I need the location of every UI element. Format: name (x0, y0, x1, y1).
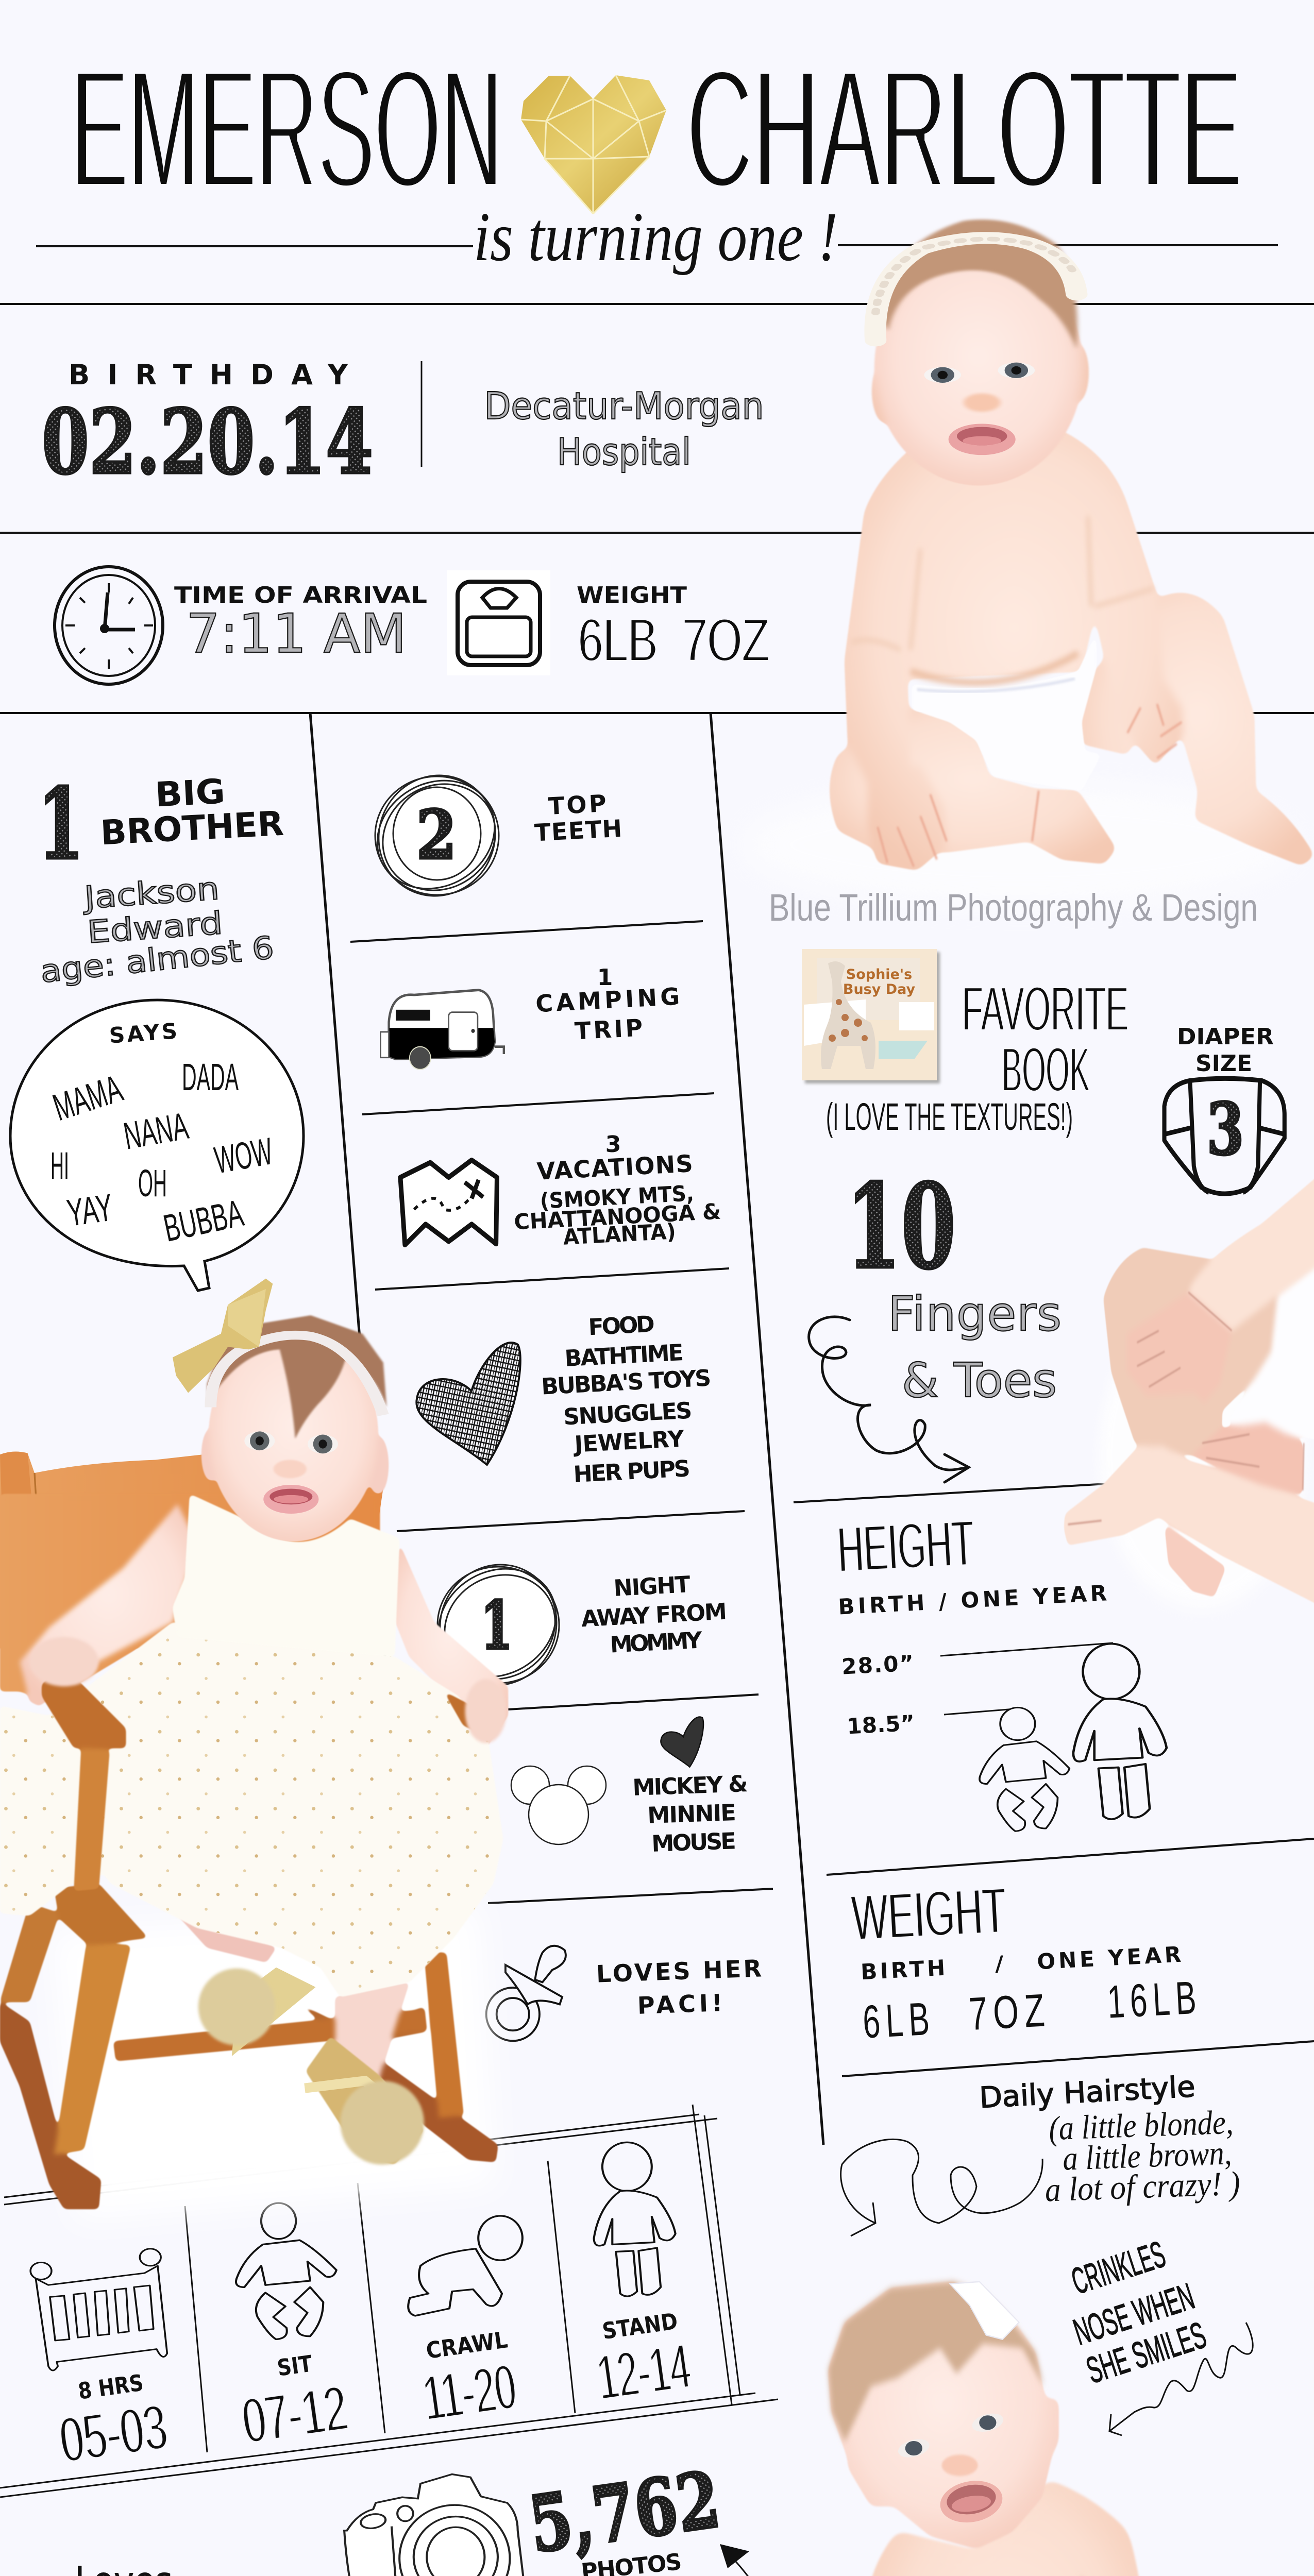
panel: says speech bubble: HI (50, 1144, 69, 1187)
panel: favorite things: JEWELRY (572, 1426, 685, 1458)
panel: favorite things: FOOD (587, 1311, 655, 1341)
panel: mickey and minnie (511, 1717, 748, 1857)
panel: diaper size: DIAPER (1177, 1024, 1274, 1050)
panel: photos taken (344, 2454, 774, 2576)
panel: mickey and minnie: MOUSE (651, 1828, 736, 1857)
panel: daily hairstyle: a lot of crazy! ) (1045, 2164, 1241, 2209)
panel: big brother (38, 767, 285, 990)
arrow: curly to hands (809, 1317, 969, 1482)
icon: small scribble heart (661, 1717, 703, 1767)
icon: crib and sleep: 8 HRS (77, 2370, 145, 2405)
panel: ten fingers and toes: 10 (846, 1159, 956, 1295)
icon: sitting baby (236, 2203, 351, 2456)
panel: weight comparison: BIRTH (860, 1955, 946, 1985)
subtitle: is turning one ! (474, 198, 838, 276)
panel: paci (486, 1946, 762, 2041)
icon: camera (344, 2474, 526, 2576)
panel: height: 28.0” (841, 1650, 914, 1680)
panel: says speech bubble (10, 1000, 304, 1291)
panel: height: BIRTH / ONE YEAR (837, 1580, 1107, 1620)
photo: baby legs and hands crop (1064, 1174, 1314, 1608)
panel: camping trip (381, 964, 680, 1070)
panel: vacations: CHATTANOOGA & (513, 1199, 721, 1235)
panel: favorite things: HER PUPS (573, 1455, 691, 1488)
panel: vacations: VACATIONS (536, 1149, 694, 1185)
panel: top teeth: TEETH (534, 815, 622, 846)
panel: time of arrival and birth weight: 6LB 7OZ (578, 606, 769, 674)
panel: weight comparison: 6LB (862, 1993, 936, 2048)
panel: favorite things: SNUGGLES (563, 1398, 693, 1431)
arrow: squiggle to baby (841, 2139, 1042, 2236)
icon: standing baby: STAND (601, 2308, 679, 2345)
favorite book label: FAVORITE (962, 974, 1128, 1044)
panel: says speech bubble: YAY (64, 1186, 115, 1234)
text: crinkles nose when she smiles (1067, 2234, 1211, 2392)
panel: says speech bubble: SAYS (108, 1018, 178, 1048)
icon: crib and sleep (30, 2249, 172, 2476)
title: EMERSON (71, 34, 502, 223)
panel: birthday: Hospital (557, 430, 691, 473)
icon: standing baby: 12-14 (593, 2331, 695, 2413)
panel: photos taken: 5,762 (524, 2454, 725, 2570)
panel: weight comparison (850, 1875, 1203, 2048)
panel: camping trip: TRIP (574, 1014, 643, 1045)
section dividers (0, 245, 1314, 2145)
icon: crawling baby (408, 2216, 523, 2433)
icon: sitting baby: SIT (276, 2351, 314, 2382)
arrow: to photo count (722, 2548, 774, 2576)
icon: crawling baby: 11-20 (419, 2351, 520, 2433)
panel: diaper size: SIZE (1195, 1050, 1252, 1077)
panel: milestones (0, 2105, 778, 2497)
book cover: Busy Day (843, 981, 916, 997)
panel: ten fingers and toes: & Toes (902, 1353, 1057, 1408)
panel: daily hairstyle: Daily Hairstyle (979, 2070, 1196, 2115)
photo: sitting baby crinkling nose (828, 2282, 1275, 2576)
panel: says speech bubble: WOW (211, 1129, 276, 1181)
panel: daily hairstyle: a little brown, (1062, 2134, 1232, 2178)
photo: baby sitting in diaper (742, 219, 1314, 907)
panel: says speech bubble: BUBBA (160, 1191, 247, 1250)
icon: crawling baby: CRAWL (425, 2327, 509, 2364)
panel: big brother: Edward (86, 905, 224, 951)
icon: standing baby at one year (1073, 1643, 1167, 1819)
panel: ten fingers and toes: Fingers (888, 1286, 1062, 1342)
panel: big brother: BROTHER (99, 804, 285, 853)
text: crinkles nose when she smiles: NOSE WHEN (1069, 2276, 1199, 2353)
arrowhead (720, 2544, 749, 2568)
panel: big brother: age: almost 6 (39, 930, 276, 990)
panel: top teeth (358, 756, 622, 915)
panel: vacations: 3 (605, 1131, 621, 1158)
panel: mickey and minnie: MINNIE (647, 1800, 736, 1829)
panel: says speech bubble: OH (138, 1162, 167, 1205)
panel: diaper size (1165, 1024, 1285, 1194)
panel: camping trip: CAMPING (535, 982, 680, 1018)
icon: diaper (1165, 1078, 1285, 1194)
panel: favorite things: BUBBA'S TOYS (541, 1365, 712, 1400)
birth weight: WEIGHT (577, 582, 687, 608)
panel: paci: LOVES HER (596, 1954, 762, 1988)
panel: big brother: BIG (154, 772, 226, 815)
panel: night away from mommy: NIGHT (613, 1571, 691, 1602)
hospital: Decatur-Morgan (484, 384, 764, 428)
panel: favorite book: (I LOVE THE TEXTURES!) (826, 1095, 1073, 1138)
icon: scribble heart (416, 1343, 520, 1465)
panel: birthday (42, 359, 764, 494)
icon: sitting baby at birth (980, 1707, 1069, 1831)
panel: height: 18.5” (846, 1710, 915, 1739)
panel: big brother: Jackson (81, 871, 221, 916)
icon: clock (55, 567, 163, 684)
icon: pacifier (486, 1946, 566, 2041)
icon: crib and sleep: 05-03 (56, 2392, 172, 2476)
icon: scale (447, 570, 550, 675)
panel: weight comparison: WEIGHT (850, 1875, 1008, 1954)
panel: night away from mommy: 1 (481, 1587, 513, 1665)
panel: night away from mommy: AWAY FROM (581, 1599, 728, 1632)
panel: mickey and minnie: MICKEY & (632, 1771, 748, 1801)
book title: Sophie's (846, 967, 912, 982)
icon: scribble circle with 1 (419, 1546, 576, 1704)
time of arrival: TIME OF ARRIVAL (174, 582, 427, 608)
panel: weight comparison: 16LB (1106, 1972, 1203, 2028)
icon: standing baby (593, 2142, 695, 2413)
book cover (802, 949, 940, 1083)
panel: favorite book (802, 949, 1128, 1138)
panel: vacations (400, 1131, 721, 1250)
panel: ten fingers and toes (809, 1159, 1062, 1482)
photo: baby on rocking chair (0, 1279, 508, 2221)
panel: vacations: (SMOKY MTS, (540, 1180, 695, 1214)
panel: time of arrival and birth weight (55, 567, 769, 684)
panel: favorite things: BATHTIME (564, 1340, 684, 1372)
icon: mouse ears (511, 1766, 606, 1844)
birthday label: BIRTHDAY (69, 359, 348, 391)
icon: sitting baby: 07-12 (238, 2372, 351, 2456)
panel: says speech bubble: MAMA (48, 1066, 128, 1129)
panel: top teeth: 2 (416, 795, 457, 874)
panel: daily hairstyle: (a little blonde, (1048, 2104, 1234, 2147)
panel: favorite book: BOOK (1002, 1035, 1090, 1105)
icon: gold geometric heart (521, 75, 666, 214)
panel: weight comparison: ONE YEAR (1036, 1942, 1182, 1974)
panel: camping trip: 1 (597, 964, 613, 991)
panel: night away from mommy: MOMMY (610, 1627, 703, 1658)
panel: time of arrival and birth weight: 7:11 AM (186, 602, 407, 665)
panel: weight comparison: / (995, 1951, 1003, 1976)
panel: top teeth: TOP (547, 789, 607, 820)
panel: vacations: ATLANTA) (563, 1218, 677, 1250)
panel: favorite things (416, 1311, 712, 1488)
icon: map (400, 1160, 497, 1245)
text: crinkles nose when she smiles: SHE SMILES (1082, 2314, 1211, 2392)
text: crinkles nose when she smiles: CRINKLES (1067, 2234, 1170, 2302)
icon: camper (381, 990, 504, 1070)
panel: diaper size: 3 (1207, 1087, 1244, 1171)
panel: big brother: 1 (38, 767, 84, 882)
birthday date: 02.20.14 (42, 389, 373, 494)
panel: weight comparison: 7OZ (968, 1985, 1052, 2040)
panel: height (836, 1507, 1167, 1831)
panel: says speech bubble: DADA (182, 1056, 239, 1098)
icon: scribble circle with 2 (358, 756, 515, 915)
panel: paci: PACI! (637, 1989, 723, 2020)
panel: daily hairstyle (841, 2070, 1241, 2236)
panel: night away from mommy (419, 1546, 728, 1704)
arrow: wavy to nose (1109, 2323, 1253, 2435)
panel: height: HEIGHT (836, 1507, 976, 1586)
panel: says speech bubble: NANA (121, 1104, 192, 1158)
